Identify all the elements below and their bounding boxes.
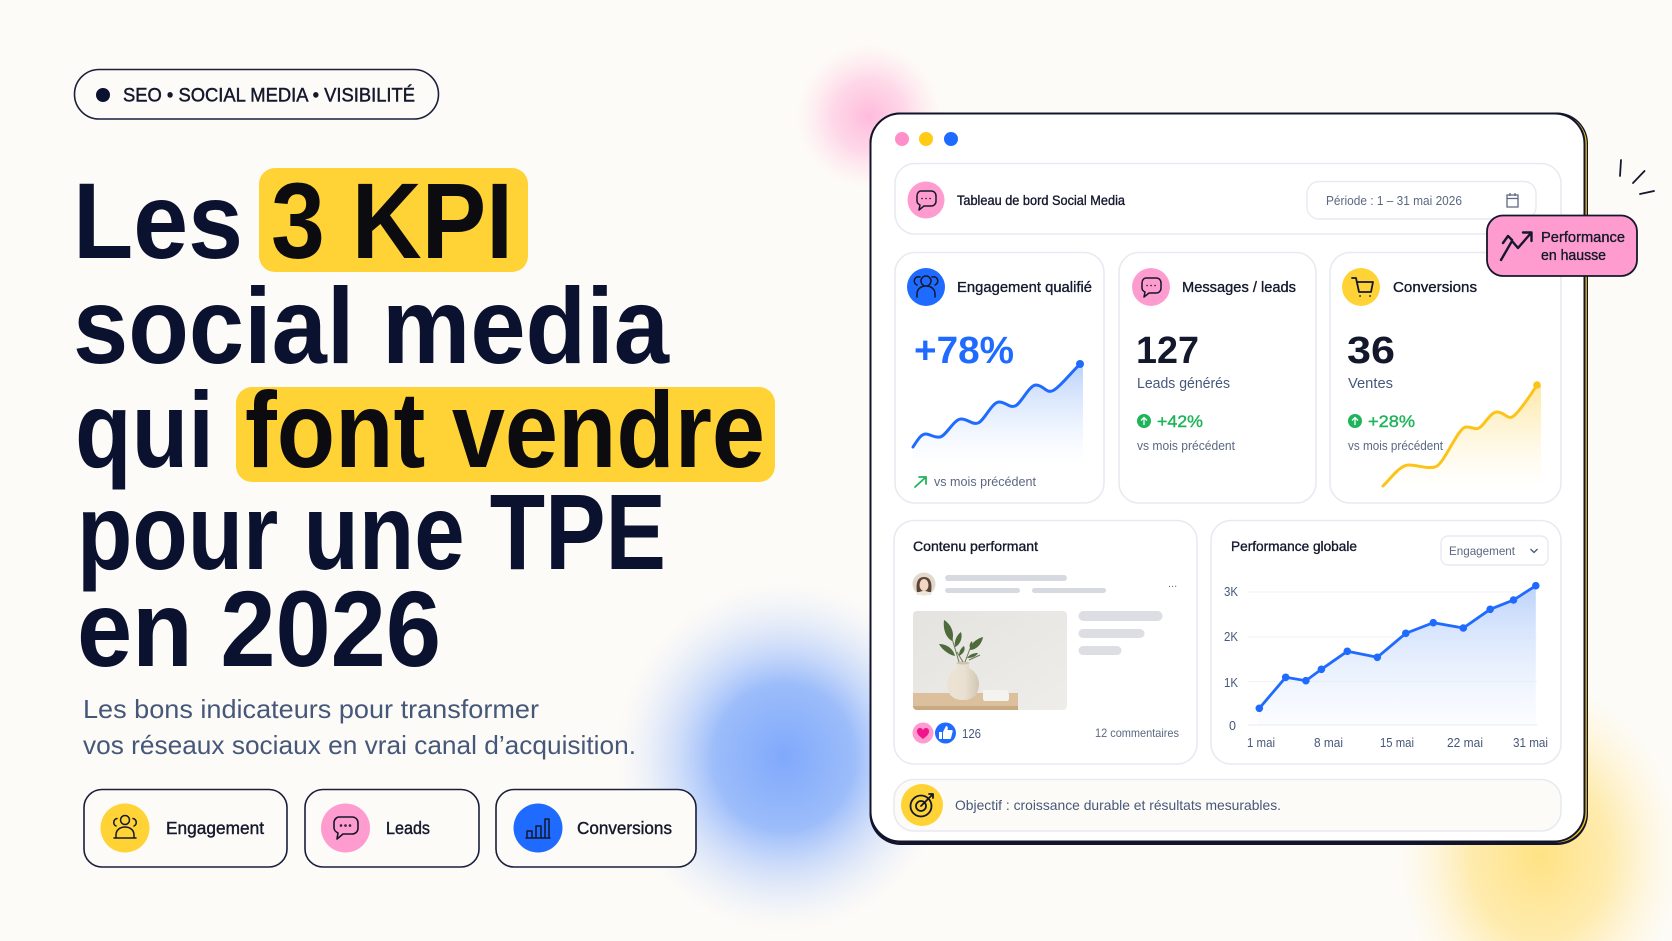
line chart: 1 mai [1247, 736, 1275, 750]
card: top content: ... [1168, 578, 1177, 590]
main title: en 2026 [77, 568, 441, 689]
main title: qui [75, 369, 214, 490]
icon: people [914, 276, 938, 297]
KPI card: conversions: Conversions [1393, 279, 1477, 296]
icon: target [910, 794, 933, 816]
line chart: 22 mai [1447, 736, 1483, 750]
button: Leads [305, 790, 479, 867]
category pill [74, 70, 438, 119]
main title: Les [73, 160, 243, 281]
KPI card: conversions: vs mois précédent [1348, 438, 1443, 453]
blurred blob: pink [797, 44, 941, 188]
card: top content: 12 commentaires [1095, 726, 1179, 740]
line chart [1224, 582, 1548, 750]
line chart: 31 mai [1513, 736, 1548, 750]
line chart: 0 [1229, 719, 1236, 733]
objective bar: Objectif : croissance durable et résultats mesurables. [955, 797, 1281, 813]
KPI card: messages / leads: vs mois précédent [1137, 438, 1235, 453]
KPI card: messages / leads [1119, 252, 1316, 503]
KPI card: messages / leads: Messages / leads [1182, 279, 1296, 296]
skeleton lines [1078, 611, 1162, 655]
main title [73, 160, 775, 689]
period selector: Période : 1 – 31 mai 2026 [1326, 193, 1462, 208]
sparkline: conversions [1383, 381, 1541, 488]
button: Conversions: Conversions [577, 818, 672, 838]
icon: chat bubble [334, 817, 358, 839]
main title: 3 KPI [271, 160, 513, 281]
delta: +28%: +28% [1368, 412, 1415, 431]
blurred blob: blue [616, 582, 952, 932]
KPI card: engagement [895, 252, 1104, 503]
KPI card: engagement: Engagement qualifié [957, 279, 1092, 296]
card: top content: Contenu performant [913, 538, 1038, 554]
KPI card: conversions: Ventes [1348, 375, 1393, 392]
period selector [1307, 182, 1536, 219]
button: Engagement: Engagement [166, 818, 264, 838]
card: global performance: Performance globale [1231, 538, 1357, 554]
icon: people [114, 816, 136, 838]
delta: +28% [1348, 412, 1415, 431]
icon: calendar [1507, 193, 1518, 207]
dropdown: Engagement [1449, 544, 1516, 558]
highlight: 3 KPI [259, 168, 528, 272]
KPI card: messages / leads: 127 [1136, 330, 1199, 372]
main title: pour une TPE [77, 471, 666, 592]
KPI card: messages / leads: Leads générés [1137, 375, 1230, 392]
subtitle: vos réseaux sociaux en vrai canal d’acquisition. [83, 730, 636, 760]
KPI card: conversions: 36 [1347, 330, 1395, 372]
icon: bar chart [526, 819, 550, 838]
blurred blob: yellow [1400, 683, 1672, 941]
icon: chat bubble [917, 191, 936, 210]
header card: Tableau de bord Social Media [957, 193, 1125, 208]
line chart: 3K [1224, 585, 1239, 599]
icon: cart [1352, 278, 1373, 296]
line chart: 1K [1224, 676, 1239, 690]
delta: +42%: +42% [1157, 412, 1203, 431]
subtitle: Les bons indicateurs pour transformer [83, 694, 539, 724]
KPI card: engagement: +78% [914, 330, 1014, 372]
window frame [870, 112, 1588, 845]
KPI card: engagement: vs mois précédent [934, 474, 1036, 489]
main title: social media [73, 265, 670, 386]
icon: rising arrow [1501, 232, 1532, 260]
main title: font vendre [245, 369, 765, 490]
button: Leads: Leads [386, 818, 430, 838]
line chart: 2K [1224, 630, 1239, 644]
photo: vase with plant [913, 611, 1067, 710]
skeleton lines [945, 575, 1106, 593]
avatar [912, 572, 936, 596]
card: global performance [1211, 520, 1561, 764]
line chart: 8 mai [1314, 736, 1343, 750]
button: Conversions [496, 790, 696, 867]
sparkline: engagement [913, 360, 1084, 464]
subtitle [83, 694, 636, 760]
badge: performance en hausse: en hausse [1541, 248, 1606, 264]
KPI card: conversions [1330, 252, 1561, 503]
badge: performance en hausse: Performance [1541, 230, 1625, 246]
reactions [912, 722, 981, 744]
sparkle strokes [1620, 160, 1654, 194]
badge: performance en hausse [1487, 216, 1637, 276]
category pill: SEO • SOCIAL MEDIA • VISIBILITÉ [123, 84, 415, 106]
highlight: font vendre [236, 387, 775, 482]
window dots [895, 132, 958, 146]
line chart: 15 mai [1380, 736, 1414, 750]
dropdown [1441, 536, 1548, 565]
objective bar [894, 780, 1561, 831]
delta: +42% [1137, 412, 1203, 431]
reactions: 126 [962, 726, 981, 741]
button: Engagement [84, 790, 287, 867]
icon: green arrow [915, 477, 926, 487]
icon: chat bubble [1142, 278, 1161, 297]
card: top content [894, 520, 1197, 764]
header card [895, 164, 1561, 234]
dashboard window [870, 112, 1588, 845]
